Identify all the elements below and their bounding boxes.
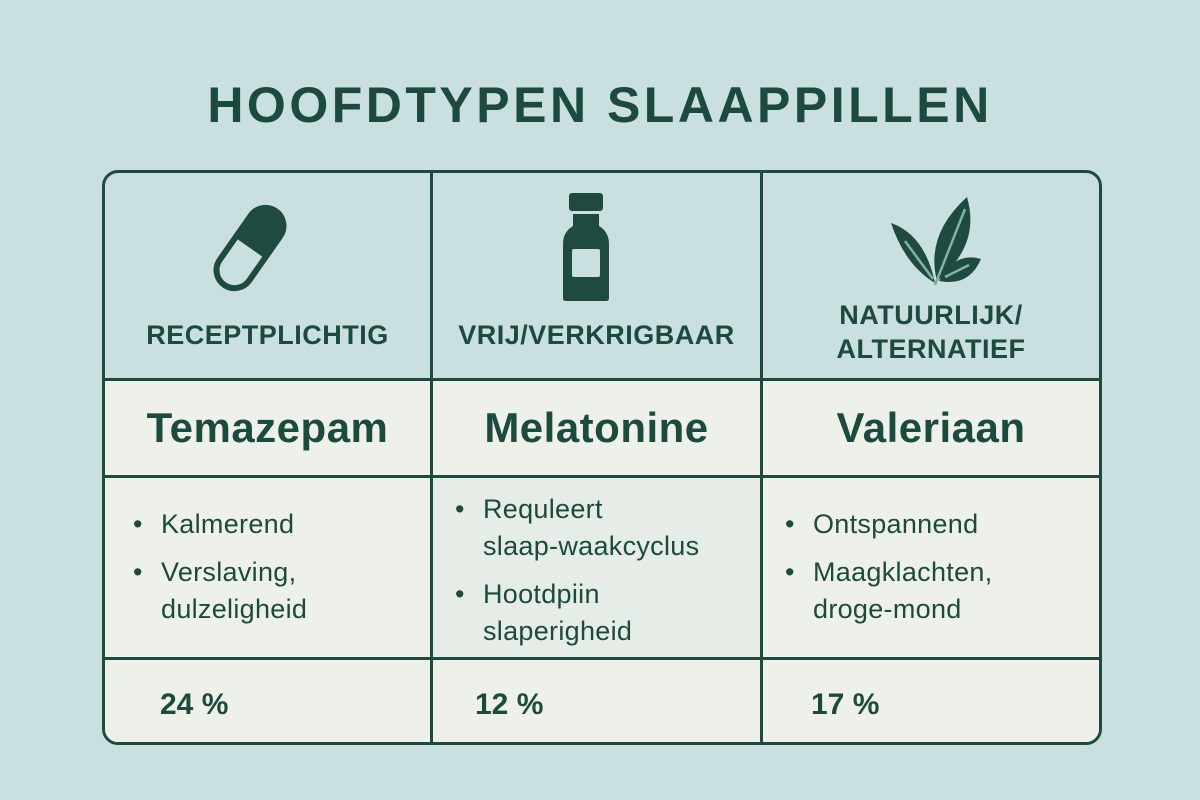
header row — [105, 173, 1099, 381]
label: natuurlijk — [836, 300, 1025, 364]
bullets row: Maagklachten, — [813, 557, 993, 587]
bullets row: droge-mond — [813, 594, 962, 624]
label: natuurlijk: NATUURLIJK/ — [839, 300, 1023, 330]
name row — [105, 381, 1099, 478]
icon: capsule — [214, 204, 286, 292]
icon: bottle — [563, 193, 609, 301]
bullets row: Requleert — [483, 494, 603, 524]
percent row: 17 % — [811, 688, 879, 721]
name row: Temazepam — [147, 404, 388, 451]
label: natuurlijk: ALTERNATIEF — [836, 334, 1025, 364]
label: vrij verkrijgbaar: VRIJ/VERKRIGBAAR — [458, 320, 735, 350]
name row: Melatonine — [484, 404, 709, 451]
bullets row: slaperigheid — [483, 616, 632, 646]
icon: leaves — [891, 197, 981, 286]
bullets row: Kalmerend — [161, 509, 294, 539]
bullets row: dulzeligheid — [161, 594, 307, 624]
percent row: 24 % — [160, 688, 228, 721]
bullets row: slaap-waakcyclus — [483, 531, 699, 561]
percent row — [105, 660, 1099, 742]
table — [102, 170, 1102, 745]
label: receptplichtig: RECEPTPLICHTIG — [146, 320, 389, 350]
name row: Valeriaan — [837, 404, 1025, 451]
bullets row: Hootdpiin — [483, 579, 600, 609]
percent row: 12 % — [475, 688, 543, 721]
bullets row: Verslaving, — [161, 557, 296, 587]
bullets row: Ontspannend — [813, 509, 978, 539]
bullets row — [105, 478, 1099, 660]
title: HOOFDTYPEN SLAAPPILLEN — [207, 77, 993, 133]
